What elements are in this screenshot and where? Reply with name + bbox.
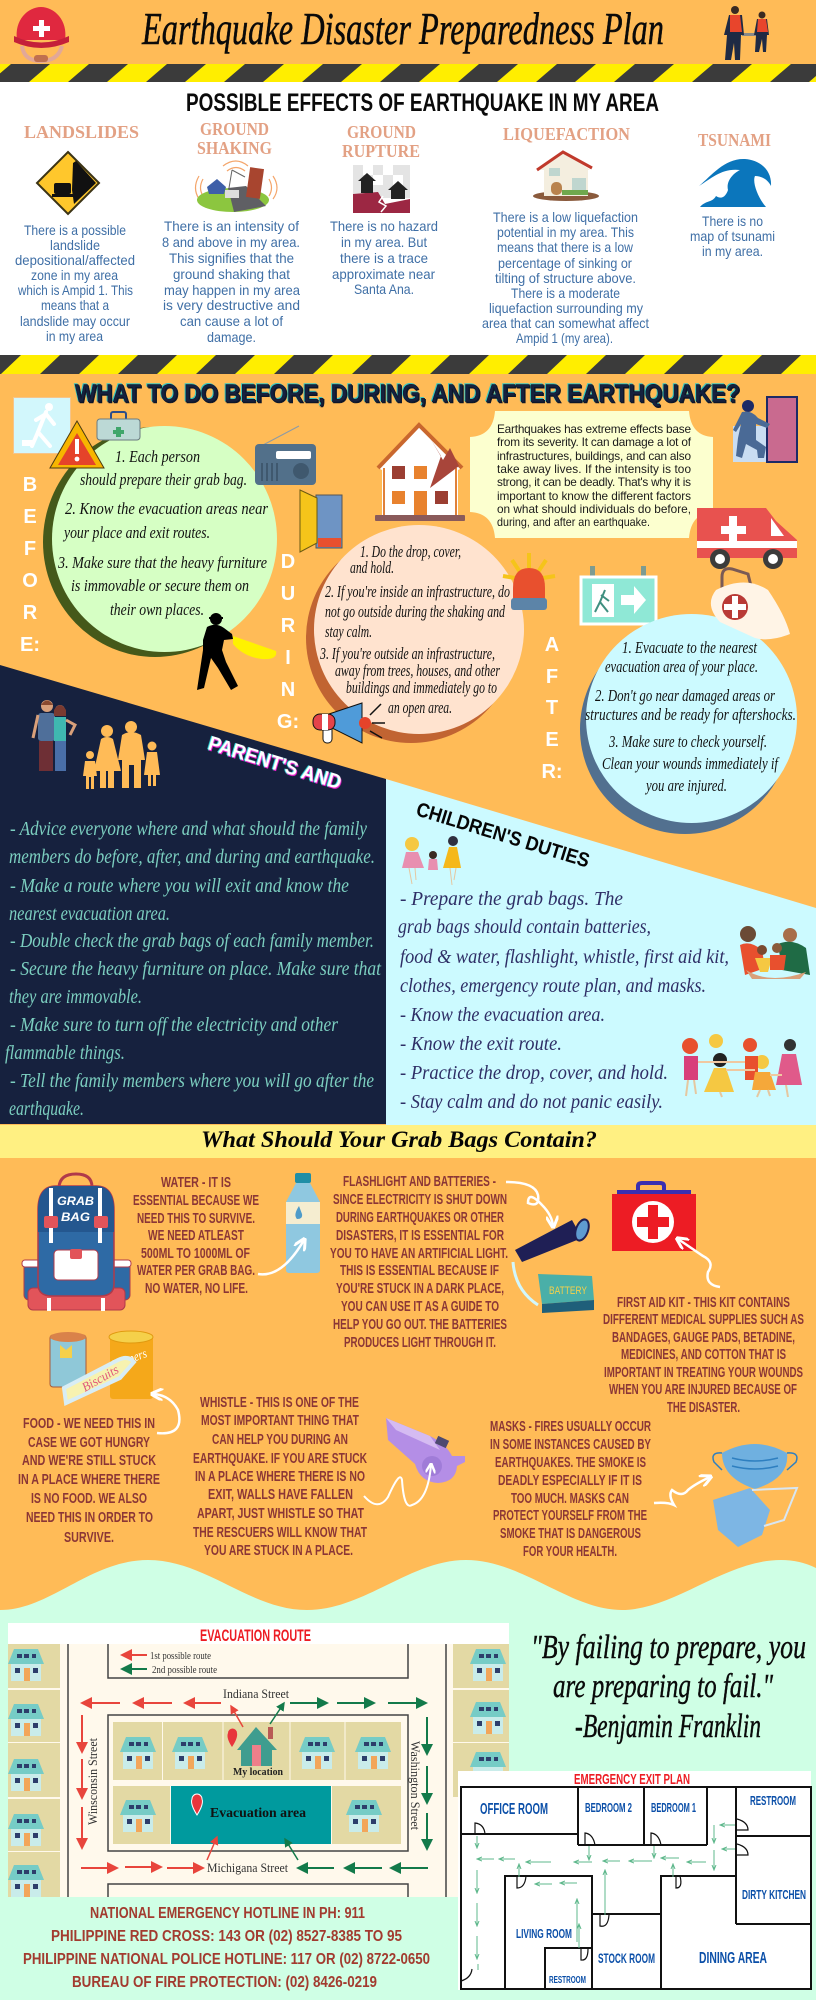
text: masks: PROTECT YOURSELF FROM THE (493, 1508, 647, 1524)
icon: backpack (22, 1174, 131, 1311)
arrow: to first aid kit (678, 1239, 720, 1287)
children list: food & water, flashlight, whistle, first aid kit, (400, 946, 729, 968)
room labels (480, 1793, 806, 1986)
column: ground shaking: can cause a lot of (180, 313, 283, 329)
text: whistle: EARTHQUAKE. IF YOU ARE STUCK (193, 1451, 367, 1467)
column: ground shaking: damage. (207, 329, 256, 345)
street labels: Winsconsin Street (85, 1738, 100, 1825)
icon: whistle (386, 1418, 465, 1483)
quote (531, 1629, 806, 1745)
icon: family silhouette (83, 721, 160, 789)
legend (108, 1644, 408, 1678)
after text: 1. Evacuate to the nearest (622, 638, 758, 657)
room labels: STOCK ROOM (598, 1950, 655, 1966)
parents list: they are immovable. (9, 986, 142, 1008)
text: masks (490, 1419, 651, 1560)
column: tsunami: TSUNAMI (698, 130, 771, 150)
column: ground shaking (162, 119, 300, 345)
after label: F (546, 666, 558, 688)
during text: not go outside during the shaking and (325, 602, 505, 621)
street labels (85, 1686, 423, 1875)
before label (20, 474, 40, 656)
text: masks: TOO MUCH. MASKS CAN (511, 1491, 629, 1507)
street labels: Michigana Street (207, 1860, 288, 1875)
text: food: IS NO FOOD. WE ALSO (31, 1491, 147, 1507)
column: ground rupture: in my area. But (341, 234, 427, 250)
icon: exit sign (14, 398, 70, 454)
wave: mint bottom background (0, 1560, 816, 2000)
during label: D (281, 551, 295, 573)
banner: grab bag heading: What Should Your Grab Bags Contain? (201, 1127, 597, 1152)
text: flashlight: HELP YOU GO OUT. THE BATTERIES (333, 1317, 507, 1333)
text: flashlight: FLASHLIGHT AND BATTERIES - (343, 1174, 496, 1190)
room labels: LIVING ROOM (516, 1926, 572, 1941)
during text: 2. If you're inside an infrastructure, do (325, 582, 510, 601)
before label: R (23, 602, 38, 624)
after text (585, 638, 796, 795)
panel: emergency exit plan (458, 1771, 811, 1990)
text: water: NEED THIS TO SURVIVE. (137, 1211, 255, 1227)
column: liquefaction: There is a low liquefaction (493, 209, 638, 225)
column: tsunami (690, 130, 775, 259)
text: water: WATER - IT IS (161, 1175, 231, 1191)
callout: earthquake intro: during, and after an earthquake. (497, 515, 650, 529)
column: landslides: LANDSLIDES (24, 122, 139, 142)
column: landslides: depositional/affected (15, 252, 135, 268)
text: food: AND WE'RE STILL STUCK (22, 1453, 156, 1469)
text: masks: MASKS - FIRES USUALLY OCCUR (490, 1419, 651, 1435)
callout: earthquake intro: infrastructures, buildings, and can also (497, 449, 691, 463)
text: water (133, 1175, 259, 1297)
icon: warning triangle (50, 421, 104, 468)
street labels: Indiana Street (223, 1686, 289, 1701)
my location: My location (233, 1766, 283, 1778)
column: ground shaking: ground shaking that (173, 266, 290, 282)
column: ground shaking: 8 and above in my area. (162, 234, 300, 250)
text: masks: SMOKE THAT IS DANGEROUS (500, 1526, 641, 1542)
column: landslides: in my area (46, 328, 103, 344)
column: ground shaking: GROUND (200, 119, 269, 139)
column: liquefaction: There is a moderate (511, 285, 620, 301)
text: flashlight: SINCE ELECTRICITY IS SHUT DOWN (333, 1192, 507, 1208)
room labels: OFFICE ROOM (480, 1801, 548, 1818)
text: masks: EARTHQUAKES. THE SMOKE IS (495, 1455, 646, 1471)
hotlines: BUREAU OF FIRE PROTECTION: (02) 8426-0219 (72, 1974, 377, 1991)
icon: tilted house (533, 151, 599, 201)
column: ground shaking: This signifies that the (169, 250, 294, 266)
icon: battery (538, 1274, 594, 1313)
icon: family hug (740, 926, 810, 979)
panel: parents text (5, 700, 381, 1120)
text: water: ESSENTIAL BECAUSE WE (133, 1193, 259, 1209)
icon: backpack: GRAB (57, 1194, 94, 1208)
parents list: nearest evacuation area. (9, 903, 170, 925)
icon: ambulance (697, 508, 797, 569)
callout: earthquake intro: strong, it can be deadly. That's why it is (497, 475, 691, 489)
icon: ground shaking (196, 161, 277, 212)
hotlines: PHILIPPINE RED CROSS: 143 OR (02) 8527-8385 TO 95 (51, 1928, 402, 1945)
icon: megaphone (313, 703, 385, 743)
column: landslides: means that a (41, 297, 109, 313)
text: food (18, 1416, 160, 1546)
icon: radio (255, 426, 316, 485)
before text: 2. Know the evacuation areas near (65, 499, 268, 518)
panel: possible effects (0, 82, 816, 355)
text: flashlight: DURING EARTHQUAKES OR OTHER (336, 1210, 504, 1226)
column: liquefaction: liquefaction surrounding my (489, 300, 643, 316)
during label: N (281, 679, 295, 701)
parents list: - Advice everyone where and what should the family (10, 818, 367, 840)
parents list: - Tell the family members where you will go after the (10, 1070, 374, 1092)
panel: grab bag contents (18, 1173, 804, 1560)
before label: E (23, 506, 37, 528)
column: liquefaction: potential in my area. This (497, 224, 634, 240)
column: landslides: There is a possible (24, 222, 126, 238)
text: first aid (603, 1295, 804, 1416)
route arrows (81, 1703, 428, 1868)
column: landslides: landslide (50, 237, 100, 253)
map blocks (108, 1715, 408, 1897)
icon: exit door (300, 490, 342, 552)
text: whistle: IN A PLACE WHERE THERE IS NO (195, 1469, 365, 1485)
parents list: - Double check the grab bags of each family member. (10, 930, 374, 952)
callout: earthquake intro: from its severity. It can damage a lot of (497, 435, 692, 449)
before text (57, 447, 268, 619)
heading: parents and: PARENT'S AND (206, 733, 344, 794)
icon: dancing girls (402, 836, 461, 885)
children list: grab bags should contain batteries, (398, 916, 651, 938)
hotlines: NATIONAL EMERGENCY HOTLINE IN PH: 911 (90, 1905, 365, 1922)
column: ground rupture: Santa Ana. (354, 281, 414, 297)
exit route arrows (477, 1825, 735, 1970)
text: food: CASE WE GOT HUNGRY (28, 1435, 150, 1451)
heading: exit plan: EMERGENCY EXIT PLAN (574, 1771, 690, 1788)
evacuation area: Evacuation area (210, 1806, 306, 1821)
column: ground rupture: approximate near (332, 266, 435, 282)
before text: should prepare their grab bag. (80, 470, 247, 489)
column: ground rupture: RUPTURE (342, 141, 420, 161)
before text: their own places. (110, 600, 204, 619)
column: liquefaction: LIQUEFACTION (503, 124, 630, 144)
panel: evacuation route (8, 1623, 509, 1897)
hotlines: PHILIPPINE NATIONAL POLICE HOTLINE: 117 OR (02) 8722-0650 (23, 1951, 430, 1968)
callout: earthquake intro: Earthquakes has extreme effects base (497, 422, 691, 436)
arrow: to food (153, 1394, 179, 1433)
heading: evacuation route (8, 1623, 509, 1645)
before label: E: (20, 634, 40, 656)
after text: evacuation area of your place. (605, 657, 758, 676)
house blocks (8, 1644, 509, 1897)
during label: I (285, 647, 291, 669)
parents list (5, 818, 381, 1120)
during label: U (281, 583, 295, 605)
column: liquefaction: area that can somewhat affect (482, 315, 649, 331)
hotlines (23, 1905, 430, 1991)
text: water: 500ML TO 1000ML OF (141, 1246, 250, 1262)
column: tsunami: map of tsunami (690, 228, 775, 244)
text: whistle: THE RESCUERS WILL KNOW THAT (193, 1525, 367, 1541)
before text: your place and exit routes. (62, 523, 210, 542)
text: food: NEED THIS IN ORDER TO (26, 1510, 153, 1526)
column: ground rupture: there is a trace (340, 250, 428, 266)
column: ground shaking: is very destructive and (163, 297, 300, 313)
my location (228, 1727, 283, 1778)
during text: an open area. (388, 698, 452, 717)
before label: F (24, 538, 36, 560)
parents list: - Make a route where you will exit and know the (10, 875, 349, 897)
icon: face masks (713, 1444, 797, 1547)
panel: cyan children (386, 779, 816, 1125)
icon: ground rupture (353, 165, 410, 213)
during text: 3. If you're outside an infrastructure, (319, 644, 495, 663)
after label: T (546, 697, 558, 719)
callout: earthquake intro (470, 411, 713, 538)
panel: children text (398, 799, 810, 1113)
column: ground rupture: GROUND (347, 122, 416, 142)
text: whistle: APART, JUST WHISTLE SO THAT (197, 1506, 364, 1522)
during text (319, 542, 510, 717)
during label: G: (277, 711, 299, 733)
column: ground shaking: There is an intensity of (164, 218, 299, 234)
column: liquefaction (482, 124, 649, 346)
icon: canned food (50, 1331, 153, 1403)
text: masks: DEADLY ESPECIALLY IF IT IS (498, 1473, 642, 1489)
heading: childrens duties: CHILDREN'S DUTIES (414, 799, 592, 872)
icon: siren (503, 553, 555, 610)
text: flashlight: YOU TO HAVE AN ARTIFICIAL LIGHT. (330, 1246, 508, 1262)
room labels: BEDROOM 2 (585, 1800, 632, 1815)
column: ground rupture: There is no hazard (330, 218, 438, 234)
banner: grab bag heading (0, 1125, 816, 1158)
parents list: - Secure the heavy furniture on place. Make sure that (10, 958, 381, 980)
column: tsunami: There is no (702, 213, 763, 229)
panel: during (277, 525, 524, 743)
legend: 1st possible route (150, 1651, 211, 1662)
before label: O (22, 570, 38, 592)
callout: earthquake intro: take away lives. If the intensity is too (497, 462, 691, 476)
column: liquefaction: Ampid 1 (my area). (516, 330, 613, 346)
icon: children circle (682, 1034, 802, 1097)
text: flashlight: YOU CAN USE IT AS A GUIDE TO (341, 1299, 499, 1315)
text: masks: FOR YOUR HEALTH. (523, 1544, 617, 1560)
arrow: to whistle (364, 1465, 431, 1506)
heading: evacuation route: EVACUATION ROUTE (200, 1626, 311, 1645)
during text: stay calm. (325, 622, 372, 641)
text: whistle: EXIT, WALLS HAVE FALLEN (208, 1487, 353, 1503)
arrow: to masks (654, 1477, 710, 1505)
column: landslides: landslide may occur (20, 313, 130, 329)
text: whistle: MOST IMPORTANT THING THAT (201, 1413, 359, 1429)
text: water: WE NEED ATLEAST (148, 1228, 244, 1244)
text: first aid: THE DISASTER. (667, 1400, 740, 1416)
panel: header (14, 3, 769, 62)
panel: before (14, 398, 342, 690)
arrow: to water bottle (258, 1240, 304, 1274)
hazard stripe (0, 64, 816, 82)
text: water: WATER PER GRAB BAG. (137, 1263, 255, 1279)
column: ground rupture (330, 122, 438, 297)
text: flashlight: DISASTERS, IT IS ESSENTIAL FOR (336, 1228, 504, 1244)
column: landslides: which is Ampid 1. This (17, 282, 133, 298)
children list: - Practice the drop, cover, and hold. (400, 1062, 668, 1084)
text: flashlight: THIS IS ESSENTIAL BECAUSE IF (340, 1263, 499, 1279)
column: ground shaking: SHAKING (197, 138, 272, 158)
icon: landslide sign (37, 152, 99, 214)
column: liquefaction: means that there is a low (497, 239, 634, 255)
text: flashlight: YOU'RE STUCK IN A DARK PLACE, (336, 1281, 504, 1297)
during text: buildings and immediately go to (346, 678, 497, 697)
parents list: members do before, after, and during and earthquake. (9, 846, 375, 868)
children list: - Know the evacuation area. (400, 1004, 605, 1026)
icon: man with flashlight (197, 613, 276, 690)
during text: away from trees, houses, and other (335, 661, 500, 680)
icon: first aid kit (612, 1183, 696, 1251)
arrow: to flashlight (506, 1182, 553, 1226)
text: flashlight (330, 1174, 508, 1351)
text: flashlight: PRODUCES LIGHT THROUGH IT. (344, 1335, 496, 1351)
icon: water bottle (286, 1173, 320, 1273)
icon: medical bag (711, 569, 790, 639)
hazard stripe (0, 355, 816, 374)
panel: navy parents (0, 665, 386, 1124)
column: ground shaking: may happen in my area (164, 282, 300, 298)
panel: after (541, 569, 797, 834)
children list: - Prepare the grab bags. The (400, 888, 623, 910)
column: landslides: zone in my area (31, 267, 118, 283)
floor plan walls (461, 1787, 811, 1989)
callout: earthquake intro: on what should individuals do before, (497, 502, 691, 516)
before text: 3. Make sure that the heavy furniture (57, 553, 267, 572)
room labels: BEDROOM 1 (651, 1800, 696, 1815)
icon: canned food: Biscuits (79, 1362, 121, 1395)
before label: B (23, 474, 37, 496)
room labels: DINING AREA (699, 1950, 767, 1967)
text: whistle (193, 1395, 367, 1559)
before text: 1. Each person (115, 447, 200, 466)
icon: helmet (14, 7, 69, 62)
room labels: RESTROOM (549, 1975, 586, 1986)
after text: 3. Make sure to check yourself. (608, 732, 767, 751)
parents list: flammable things. (5, 1042, 125, 1064)
icon: damaged house (375, 423, 465, 521)
after text: you are injured. (644, 776, 727, 795)
before text: is immovable or secure them on (71, 576, 249, 595)
text: masks: IN SOME INSTANCES CAUSED BY (490, 1437, 651, 1453)
column: tsunami: in my area. (702, 243, 763, 259)
after label: R: (541, 761, 563, 783)
evacuation area (171, 1786, 331, 1844)
text: whistle: WHISTLE - THIS IS ONE OF THE (200, 1395, 359, 1411)
text: whistle: CAN HELP YOU DURING AN (212, 1432, 348, 1448)
children list: - Know the exit route. (400, 1033, 562, 1055)
children list: clothes, emergency route plan, and masks. (400, 975, 706, 997)
icon: rescue workers (724, 6, 769, 60)
column: liquefaction: percentage of sinking or (498, 255, 632, 271)
text: whistle: YOU ARE STUCK IN A PLACE. (204, 1543, 353, 1559)
during label: R (281, 615, 296, 637)
icon: tsunami wave (699, 159, 771, 207)
parents list: earthquake. (9, 1098, 84, 1120)
legend: 2nd possible route (152, 1665, 217, 1676)
icon: couple (33, 700, 75, 771)
after label (541, 634, 563, 783)
text: food: SURVIVE. (64, 1530, 114, 1546)
after label: A (545, 634, 559, 656)
doors (461, 1819, 748, 1981)
icon: battery: BATTERY (549, 1285, 588, 1297)
icon: first aid box (97, 412, 140, 440)
column: landslides (15, 122, 139, 344)
during text: 1. Do the drop, cover, (360, 542, 461, 561)
parents list: - Make sure to turn off the electricity and other (10, 1014, 338, 1036)
icon: person leaving through door (733, 397, 797, 462)
children list: - Stay calm and do not panic easily. (400, 1091, 663, 1113)
text: water: NO WATER, NO LIFE. (145, 1281, 248, 1297)
street labels: Washington Street (408, 1741, 423, 1830)
icon: exit direction sign (581, 566, 656, 624)
icon: flashlight (513, 1218, 591, 1305)
after label: E (545, 729, 559, 751)
text: food: FOOD - WE NEED THIS IN (23, 1416, 155, 1432)
children list (398, 888, 729, 1113)
during label (277, 551, 299, 733)
during text: and hold. (350, 558, 394, 577)
heading: what to do: WHAT TO DO BEFORE, DURING, AND AFTER EARTHQUAKE? (75, 380, 740, 408)
column: liquefaction: tilting of structure above. (495, 270, 636, 286)
icon: backpack: BAG (61, 1210, 90, 1224)
heading: possible effects: POSSIBLE EFFECTS OF EARTHQUAKE IN MY AREA (186, 89, 659, 117)
callout: earthquake intro: important to know the different factors (497, 489, 691, 503)
text: food: IN A PLACE WHERE THERE (18, 1472, 160, 1488)
icon: canned food: Peppers (109, 1345, 149, 1372)
